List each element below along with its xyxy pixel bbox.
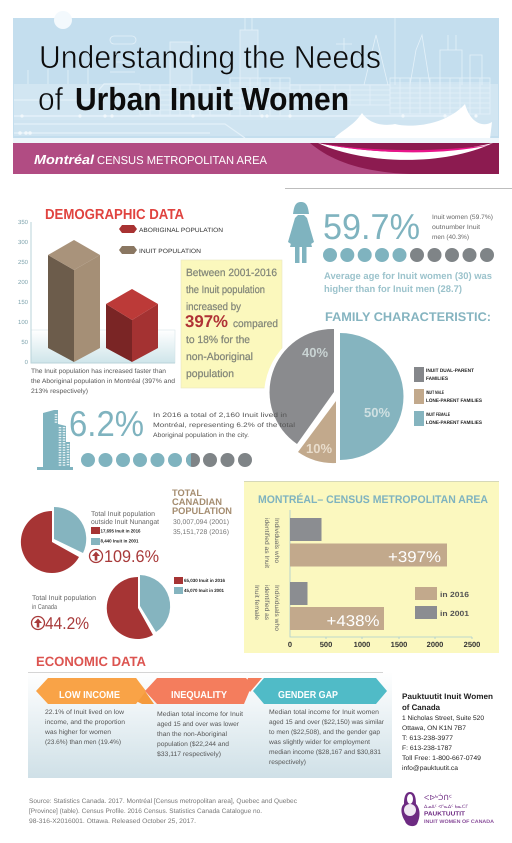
text: low income: was higher for women	[44, 729, 111, 736]
horizontal bar chart: identified as	[263, 585, 270, 620]
callout: 397% increase: Between 2001-2016	[186, 267, 277, 279]
city skyline illustration	[14, 18, 498, 138]
ribbon: low income: LOW INCOME	[59, 690, 120, 701]
icon: amauti figure	[401, 792, 420, 826]
text: gender gap: was slightly wider for employment	[268, 739, 370, 746]
text: low income: 22.1% of Inuit lived on low	[45, 709, 124, 716]
text: outside Inuit Nunangat	[91, 510, 159, 526]
legend: family characteristic: LONE-PARENT FAMILIES	[426, 420, 483, 426]
pie chart: family characteristic: 50%	[364, 405, 390, 420]
horizontal bar chart: identified as Inuit	[263, 518, 270, 568]
text: contact details: F: 613-238-1787	[402, 745, 452, 752]
text: source: [Province] (table). Census Profile. 2016 Census. Statistics Canada Catalogue no.	[29, 808, 262, 815]
text: contact details: info@pauktuutit.ca	[402, 765, 458, 772]
horizontal bar chart: Individuals who	[273, 585, 280, 631]
text: contact details: Ottawa, ON K1N 7B7	[402, 725, 466, 732]
icon: apartment building	[37, 410, 73, 470]
text: inequality: $33,117 respectively)	[157, 751, 221, 758]
axis labels: 250	[18, 259, 29, 266]
heading: panel title: MONTRÉAL– CENSUS METROPOLITAN AREA	[258, 493, 488, 506]
callout: 397% increase: non-Aboriginal	[186, 351, 253, 363]
statistic: 59.7%: 59.7%	[323, 206, 420, 247]
title: Urban Inuit Women	[75, 81, 349, 117]
axis labels: 200	[18, 279, 29, 286]
text: gender gap: respectively)	[269, 759, 306, 766]
text: outside Inuit Nunangat: outside Inuit Nunangat	[91, 518, 159, 526]
axis labels: 50	[21, 339, 29, 346]
legend: Inuit in Canada: 65,030 Inuit in 2016	[184, 578, 225, 583]
text: source: 98-316-X2016001. Ottawa. Released October 25, 2017.	[29, 818, 196, 825]
callout: 397% increase: the Inuit population	[186, 284, 265, 296]
icon: woman figure	[288, 202, 314, 263]
legend: Inuit in Canada	[174, 577, 225, 594]
callout: 397% increase: compared	[233, 318, 278, 330]
axis labels: 350	[18, 219, 29, 226]
text: contact details: Pauktuutit Inuit Women	[402, 692, 493, 701]
text: contact details: 1 Nicholas Street, Suite 520	[402, 715, 484, 722]
logo: Pauktuutit	[401, 792, 494, 826]
text: Inuit population in Canada: Total Inuit population	[32, 594, 96, 602]
subtitle bar	[13, 143, 499, 174]
text: gender gap: median income ($28,167 and $30,831	[269, 749, 381, 756]
text: inequality: than the non-Aboriginal	[157, 731, 228, 738]
dot row: 59.7%	[323, 248, 494, 262]
axis labels: 150	[18, 299, 29, 306]
horizontal bar chart: +397%	[388, 549, 441, 566]
text: low income: (23.6%) than men (19.4%)	[45, 739, 121, 746]
text: gender gap: aged 15 and over ($22,150) was similar	[269, 719, 385, 726]
bar: Inuit population	[48, 240, 100, 362]
bar: Aboriginal population	[106, 289, 158, 362]
text: gender gap	[268, 709, 385, 766]
legend: family characteristic: INUIT MALE	[426, 390, 444, 396]
callout: 397% increase	[181, 260, 282, 388]
text: source	[29, 798, 298, 825]
panel: economic data	[28, 672, 392, 778]
statistic: 6.2%: 6.2%	[69, 403, 144, 444]
ribbon: inequality: INEQUALITY	[171, 690, 227, 701]
skyline lights	[18, 114, 478, 135]
heading: economic data: ECONOMIC DATA	[36, 654, 146, 669]
horizontal bar chart: 2000	[427, 640, 443, 649]
pie chart: family characteristic	[264, 324, 408, 468]
legend: bar chart: ABORIGINAL POPULATION	[139, 227, 223, 234]
statistic: 44.2% up: 44.2%	[45, 614, 89, 633]
callout: 397% increase: increased by	[186, 301, 242, 313]
horizontal bar chart	[253, 510, 480, 649]
text: organisation name: ᐃᓄᐃᑦ ᐊᕐᓇᐃᑦ ᑲᓇᑕᒥ	[424, 804, 469, 810]
pie chart: family characteristic: 10%	[306, 441, 332, 456]
statistic: 109.6% up: 109.6%	[104, 547, 159, 566]
text: inequality: Median total income for Inuit	[157, 711, 243, 718]
heading: total Canadian population: CANADIAN	[172, 497, 222, 508]
ribbon: gender gap	[253, 678, 387, 704]
text: inequality: aged 15 and over was lower	[157, 721, 240, 728]
pie chart: family characteristic: 40%	[302, 345, 328, 360]
legend: outside Inuit Nunangat: 17,695 Inuit in 2016	[100, 528, 141, 534]
heading: total Canadian population: TOTAL	[172, 488, 202, 499]
heading: total Canadian population	[172, 488, 232, 517]
heading: demographic data: DEMOGRAPHIC DATA	[45, 207, 184, 223]
text: inequality: population ($22,244 and	[157, 741, 229, 748]
text: contact details: Toll Free: 1-800-667-0749	[402, 755, 481, 762]
title: of	[38, 81, 63, 117]
subtitle bar: Montréal	[34, 152, 94, 167]
horizontal bar chart: Individuals who	[273, 518, 280, 563]
legend: census years: in 2001	[440, 609, 469, 618]
horizontal bar chart: 500	[320, 640, 332, 649]
ribbon: low income	[36, 678, 154, 704]
legend: family characteristic: FAMILIES	[426, 376, 449, 382]
subtitle bar: CENSUS METROPOLITAN AREA	[97, 155, 267, 167]
text: 2,160 Inuit: Montréal, representing 6.2% of the total	[153, 422, 295, 429]
legend: Inuit in Canada: 45,070 Inuit in 2001	[184, 588, 224, 593]
text: women outnumber men: outnumber Inuit	[432, 224, 480, 231]
legend: census years: in 2016	[440, 590, 469, 599]
text: average age: higher than for Inuit men (28.7)	[324, 284, 462, 295]
text: average age	[324, 271, 492, 295]
heading: total Canadian population: POPULATION	[172, 506, 232, 517]
horizontal bar chart: 0	[288, 640, 292, 649]
panel: Montréal census metropolitan area	[244, 481, 499, 653]
horizontal bar chart: Inuit female	[253, 585, 260, 620]
header banner	[13, 11, 499, 174]
horizontal bar chart: 1500	[391, 640, 407, 649]
text: contact details: of Canada	[402, 703, 441, 712]
horizontal bar chart: +438%	[326, 613, 380, 630]
legend: outside Inuit Nunangat: 8,440 Inuit in 2001	[100, 538, 139, 544]
pie chart: outside Inuit Nunangat	[21, 507, 86, 573]
text: organisation name: INUIT WOMEN OF CANADA	[424, 819, 494, 825]
text: outside Inuit Nunangat: Total Inuit population	[91, 510, 155, 518]
text: contact details: T: 613-238-3977	[402, 735, 453, 742]
text: organisation name: PAUKTUUTIT	[424, 810, 465, 818]
text: chart caption: 213% respectively)	[31, 388, 88, 395]
legend: bar chart	[119, 225, 223, 255]
text: 2,160 Inuit: Aboriginal population in the city.	[153, 432, 249, 439]
text: source: Source: Statistics Canada. 2017. Montréal [Census metropolitan area], Quebec and Quebec	[29, 798, 298, 805]
legend: census years	[415, 587, 469, 619]
ribbon: inequality	[145, 678, 262, 704]
text: gender gap: to men ($22,508), and the gender gap	[269, 729, 380, 736]
callout: 397% increase: 397%	[185, 312, 228, 331]
text: inequality	[157, 711, 243, 758]
text: 2,160 Inuit	[153, 412, 295, 439]
text: women outnumber men: men (40.3%)	[432, 234, 469, 241]
text: women outnumber men: Inuit women (59.7%)	[432, 214, 493, 221]
axis labels: 0	[25, 359, 29, 366]
title: Understanding the Needs	[39, 39, 381, 75]
pie chart: Inuit in Canada	[107, 575, 170, 639]
text: chart caption: the Aboriginal population in Montréal (397% and	[31, 378, 175, 385]
text: low income	[44, 709, 125, 746]
legend: outside Inuit Nunangat	[91, 527, 141, 545]
text: Canadian population figures: 35,151,728 (2016)	[173, 529, 229, 536]
text: women outnumber men	[432, 214, 493, 241]
horizontal bar chart: 2500	[464, 640, 480, 649]
legend: family characteristic: INUIT FEMALE	[426, 412, 450, 418]
legend: family characteristic: LONE-PARENT FAMILIES	[426, 398, 483, 404]
text: Inuit population in Canada	[32, 594, 96, 611]
title	[38, 39, 381, 117]
legend: family characteristic	[414, 367, 483, 426]
callout: 397% increase: population	[186, 368, 234, 380]
text: Canadian population figures: 30,007,094 (2001)	[173, 519, 229, 526]
text: chart caption: The Inuit population has increased faster than	[31, 368, 166, 375]
legend: family characteristic: INUIT DUAL-PARENT	[426, 368, 474, 374]
text: Canadian population figures	[173, 519, 229, 536]
text: average age: Average age for Inuit women (30) was	[324, 271, 492, 282]
ribbon: gender gap: GENDER GAP	[278, 690, 338, 701]
text: contact details	[402, 692, 493, 772]
axis labels	[18, 219, 29, 366]
text: gender gap: Median total income for Inuit women	[269, 709, 379, 716]
bar chart: population growth	[18, 219, 175, 366]
axis labels: 100	[18, 319, 29, 326]
dot row: 6.2%	[81, 453, 252, 467]
text: low income: income, and the proportion	[45, 719, 125, 726]
text: organisation name	[424, 793, 494, 825]
callout: 397% increase: to 18% for the	[186, 334, 250, 346]
legend: bar chart: INUIT POPULATION	[139, 248, 201, 255]
axis labels: 300	[18, 239, 29, 246]
text: Inuit population in Canada: in Canada	[32, 603, 57, 611]
heading: family characteristic: FAMILY CHARACTERISTIC:	[325, 310, 491, 324]
text: organisation name: ᐸᐅᒃᑑᑎᑦ	[424, 793, 452, 802]
text: 2,160 Inuit: In 2016 a total of 2,160 Inuit lived in	[153, 412, 288, 419]
horizontal bar chart: 1000	[354, 640, 370, 649]
text: chart caption	[31, 368, 175, 395]
